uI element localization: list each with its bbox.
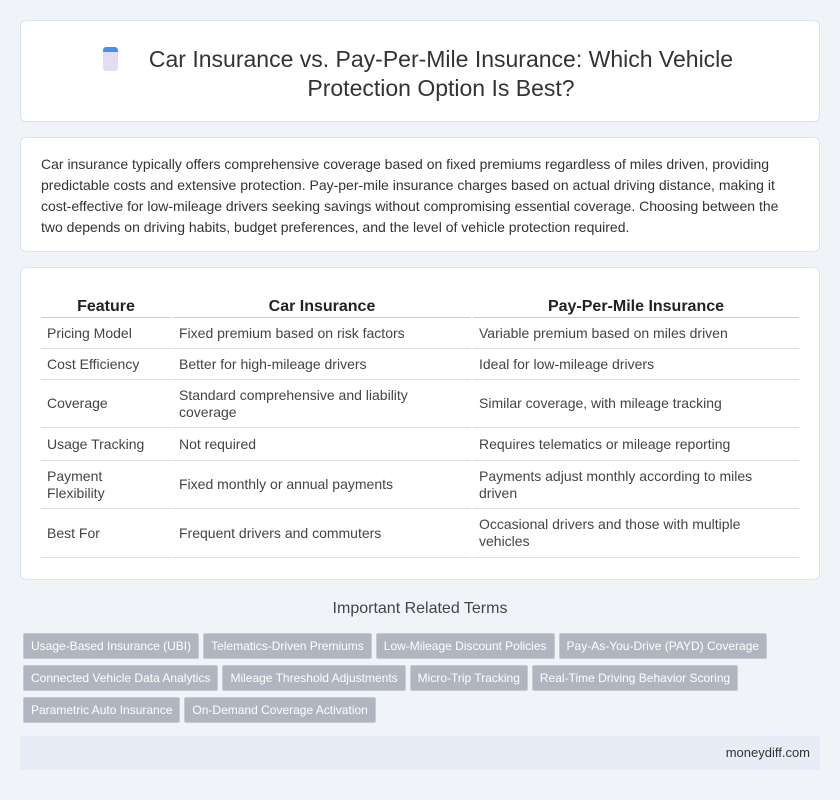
comparison table panel: Fixed premium based on risk factors [179, 324, 405, 340]
related terms tags: Telematics-Driven Premiums [211, 639, 364, 653]
comparison table panel: Better for high-mileage drivers [179, 356, 367, 372]
comparison table panel: Similar coverage, with mileage tracking [479, 395, 722, 411]
intro text: Car insurance typically offers comprehensive coverage based on fixed premiums regardless of miles driven, providing predictable costs and extensive protection. Pay-per-mile insurance charges based on actual driving distance, making it cost-effective for low-mileage drivers seeking savings without compromising essential coverage. Choosing between the two depends on driving habits, budget preferences, and the level of vehicle protection required. [41, 156, 778, 235]
comparison table panel: Occasional drivers and those with multiple vehicles [479, 516, 740, 549]
related terms tags: Low-Mileage Discount Policies [384, 639, 547, 653]
icon: calendar [103, 47, 118, 71]
comparison table panel: Requires telematics or mileage reporting [479, 436, 730, 452]
comparison table panel: Variable premium based on miles driven [479, 324, 728, 340]
comparison table panel: Payments adjust monthly according to miles driven [479, 468, 752, 500]
comparison table panel: Cost Efficiency [47, 356, 139, 372]
comparison table panel [20, 267, 820, 580]
footer [20, 736, 820, 770]
comparison table panel: Feature [77, 298, 135, 314]
related terms tags: Usage-Based Insurance (UBI) [31, 639, 191, 653]
comparison table panel: Pay-Per-Mile Insurance [548, 298, 724, 314]
comparison table panel: Pricing Model [47, 324, 132, 340]
header card [20, 20, 820, 122]
comparison table panel: Not required [179, 436, 256, 452]
related terms tags: Mileage Threshold Adjustments [230, 671, 398, 685]
related terms tags: Micro-Trip Tracking [418, 671, 520, 685]
comparison table panel: Car Insurance [269, 298, 375, 314]
related terms tags: Real-Time Driving Behavior Scoring [540, 671, 730, 685]
comparison table panel: Coverage [47, 395, 108, 411]
comparison table panel: Best For [47, 524, 100, 540]
comparison table panel: Flexibility [47, 484, 105, 500]
related terms tags: On-Demand Coverage Activation [192, 703, 368, 717]
comparison table panel: Ideal for low-mileage drivers [479, 356, 654, 372]
comparison table panel: Payment [47, 468, 102, 484]
comparison table panel: Usage Tracking [47, 436, 144, 452]
intro text [20, 137, 820, 252]
related terms tags: Connected Vehicle Data Analytics [31, 671, 210, 685]
related terms heading: Important Related Terms [333, 600, 507, 617]
footer: moneydiff.com [726, 745, 810, 760]
comparison table panel: Standard comprehensive and liability coverage [179, 386, 408, 420]
title: Car Insurance vs. Pay-Per-Mile Insurance: Which Vehicle Protection Option Is Best? [149, 46, 733, 101]
related terms tags [23, 633, 767, 723]
related terms tags: Pay-As-You-Drive (PAYD) Coverage [567, 639, 759, 653]
comparison table panel: Frequent drivers and commuters [179, 524, 381, 540]
related terms tags: Parametric Auto Insurance [31, 703, 172, 717]
comparison table panel: Fixed monthly or annual payments [179, 476, 393, 492]
